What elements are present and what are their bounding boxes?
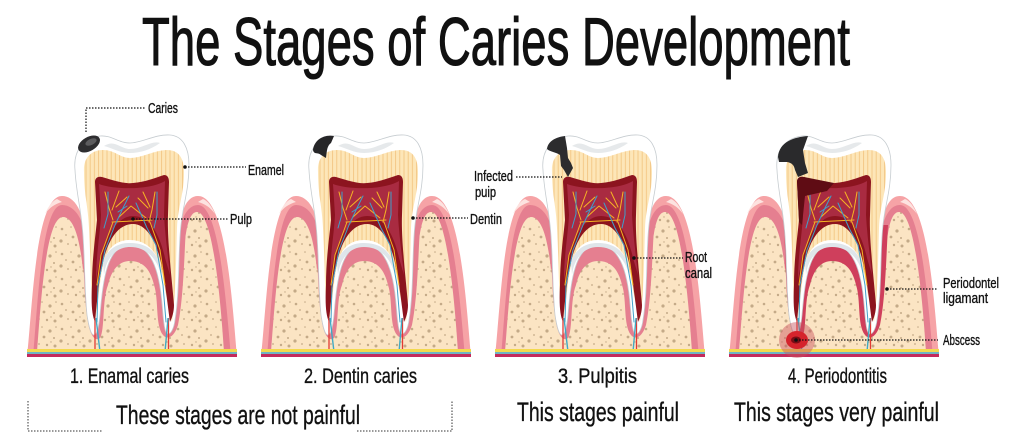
- label: pulp: [131, 211, 252, 228]
- label: abscess: Abscess: [943, 332, 980, 349]
- icon: abscess: [779, 322, 815, 358]
- label: enamel: [183, 162, 284, 179]
- label: infected pulp: puip: [475, 184, 496, 201]
- pain note: stages 1-2: These stages are not painful: [116, 400, 360, 430]
- pain note: stage 4: This stages very painful: [734, 397, 939, 427]
- panel: periodontitis tooth: [729, 135, 939, 358]
- pain note: stage 3: This stages painful: [517, 397, 679, 427]
- label: caries: Caries: [148, 100, 178, 117]
- label: dentin: [411, 211, 502, 228]
- bracket: not painful: [28, 401, 452, 431]
- icon: deep decay: [778, 136, 808, 177]
- icon: dentin decay: [313, 136, 334, 158]
- label: caries: [86, 100, 178, 132]
- label: periodontal ligament: [885, 275, 999, 307]
- panel: dentin caries tooth: [261, 135, 471, 357]
- icon: pulp decay: [547, 136, 573, 177]
- label: root canal: [632, 249, 712, 282]
- icon: enamel decay: [75, 132, 103, 156]
- stage name 1: 1. Enamal caries: [70, 365, 189, 388]
- label: periodontal ligament: Periodontel: [943, 275, 999, 292]
- label: enamel: Enamel: [248, 162, 284, 179]
- label: infected pulp: Infected: [474, 168, 513, 185]
- stage name 3: 3. Pulpitis: [558, 365, 637, 388]
- stage name 4: 4. Periodontitis: [788, 365, 887, 388]
- label: pulp: Pulp: [230, 211, 252, 228]
- darkened pulp: [797, 177, 834, 225]
- label: root canal: canal: [685, 265, 712, 282]
- label: abscess: [794, 332, 980, 349]
- label: periodontal ligament: ligamant: [943, 290, 989, 307]
- panel: enamel caries tooth: [27, 132, 237, 357]
- panel: pulpitis tooth: [495, 135, 705, 357]
- label: dentin: Dentin: [470, 211, 502, 228]
- stage name 2: 2. Dentin caries: [304, 365, 417, 388]
- label: infected pulp: [474, 168, 562, 201]
- label: root canal: Root: [685, 249, 708, 266]
